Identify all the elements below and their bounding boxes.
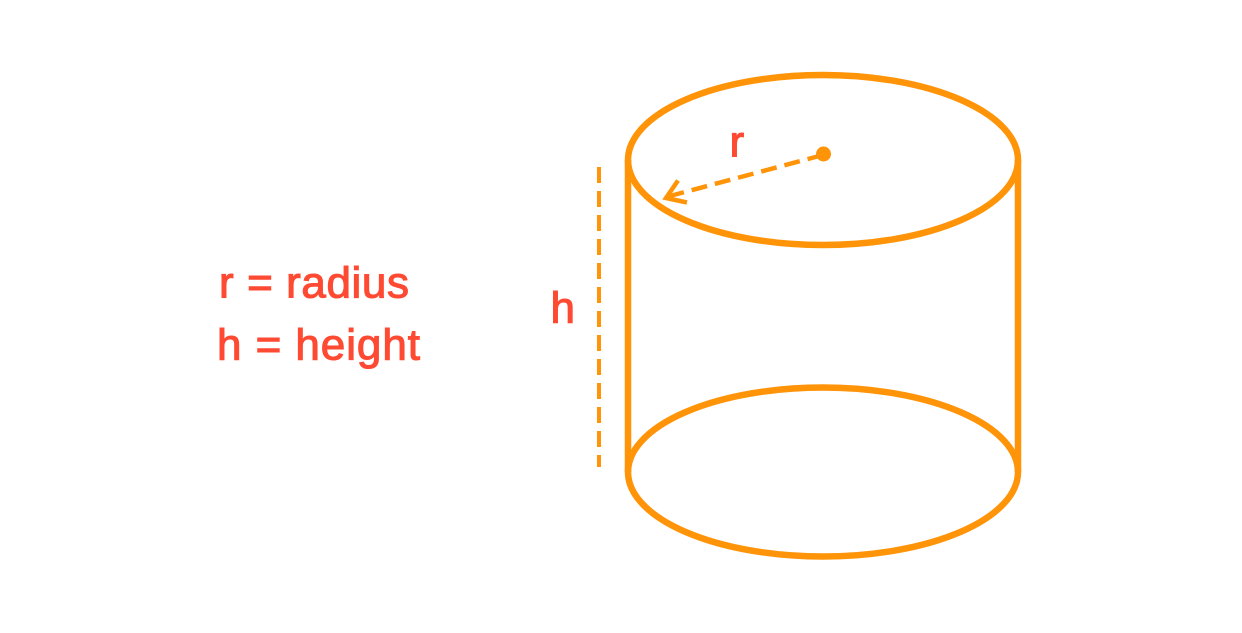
height label: h xyxy=(550,284,575,332)
legend text: r = radius xyxy=(219,258,409,308)
legend text xyxy=(217,258,420,370)
radius label: r xyxy=(730,118,744,166)
height dashed line xyxy=(597,167,601,467)
legend text: h = height xyxy=(217,320,420,370)
radius arrow xyxy=(666,146,831,202)
cylinder xyxy=(628,75,1018,556)
